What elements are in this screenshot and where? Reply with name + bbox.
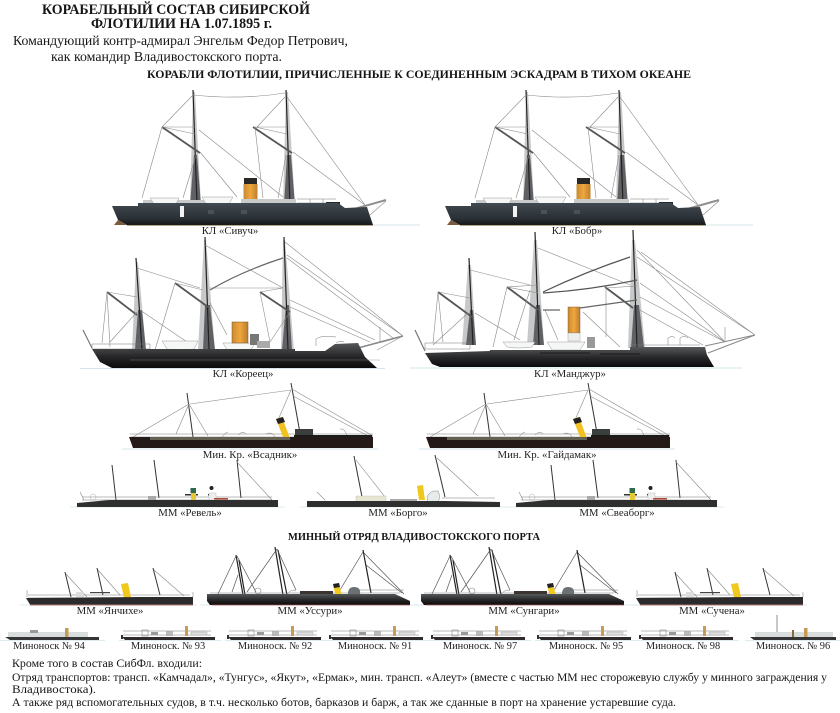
torpedo boat No 92: Миноноск. № 92 <box>238 641 312 652</box>
ship: gunboat Sivuch: КЛ «Сивуч» <box>202 225 258 237</box>
ship: Ussuri <box>200 547 425 617</box>
torpedo boat No 96 <box>745 615 840 652</box>
ship: torpedo vessel Revel <box>70 460 285 519</box>
heading: squadron ships: КОРАБЛИ ФЛОТИЛИИ, ПРИЧИСЛЕННЫЕ К СОЕДИНЕННЫМ ЭСКАДРАМ В ТИХОМ ОКЕАНЕ <box>147 69 691 81</box>
torpedo boat No 91: Миноноск. № 91 <box>338 641 412 652</box>
ship: Yanchihe: ММ «Янчихе» <box>77 605 143 617</box>
title <box>42 1 310 32</box>
ship: gunboat Koreets: КЛ «Кореец» <box>213 368 273 380</box>
heading: Vladivostok mine detachment: МИННЫЙ ОТРЯД ВЛАДИВОСТОКСКОГО ПОРТА <box>288 531 540 543</box>
ship: gunboat Bobr <box>445 90 753 237</box>
note: other fleet vessels: Кроме того в состав СибФл. входили: <box>12 658 202 670</box>
ship: torpedo vessel Sveaborg <box>509 460 724 519</box>
torpedo boat No 96: Миноноск. № 96 <box>756 641 830 652</box>
torpedo boat No 93: Миноноск. № 93 <box>131 641 205 652</box>
note: other fleet vessels: Отряд транспортов: трансп. «Камчадал», «Тунгус», «Якут», «Ермак», мин. трансп. «Алеут» (вместе с частью ММ нес сторожевую службу у минного заграждения у <box>12 672 827 684</box>
torpedo boat No 95: Миноноск. № 95 <box>549 641 623 652</box>
ship: Suchena: ММ «Сучена» <box>679 605 745 617</box>
ship: Yanchihe <box>20 568 197 617</box>
torpedo boat No 97: Миноноск. № 97 <box>443 641 517 652</box>
ship: mine cruiser Gaydamak <box>419 383 675 461</box>
ship: gunboat Sivuch <box>112 90 420 237</box>
commander note <box>13 34 348 65</box>
ship: Sungari: ММ «Сунгари» <box>488 605 560 617</box>
torpedo boat No 93 <box>119 626 221 652</box>
ship: Sungari <box>414 547 639 617</box>
ship: mine cruiser Vsadnik: Мин. Кр. «Всадник» <box>203 449 297 461</box>
ship: gunboat Manjur <box>410 230 755 380</box>
note: other fleet vessels: А также ряд вспомогательных судов, в т.ч. несколько ботов, барказов и барж, а так же сданные в порт на хранение устаревшие суда. <box>12 697 676 709</box>
ship: torpedo vessel Borgo <box>300 455 510 519</box>
note: other fleet vessels <box>12 658 827 709</box>
ship: torpedo vessel Revel: ММ «Ревель» <box>158 507 222 519</box>
ship: gunboat Bobr: КЛ «Бобр» <box>552 225 602 237</box>
commander note: как командир Владивостокского порта. <box>51 50 282 65</box>
torpedo boat No 91 <box>327 626 429 652</box>
torpedo boat No 97 <box>429 626 531 652</box>
ship: mine cruiser Gaydamak: Мин. Кр. «Гайдамак» <box>498 449 596 461</box>
torpedo boat No 94: Миноноск № 94 <box>13 641 86 652</box>
ship: Ussuri: ММ «Уссури» <box>277 605 343 617</box>
note: other fleet vessels: Владивостока). <box>12 684 96 696</box>
torpedo boat No 92 <box>225 626 327 652</box>
title: ФЛОТИЛИИ НА 1.07.1895 г. <box>91 16 272 32</box>
torpedo boat No 94 <box>0 628 105 652</box>
commander note: Командующий контр-адмирал Энгельм Федор Петрович, <box>13 34 348 49</box>
torpedo boat No 95 <box>535 626 637 652</box>
ship: gunboat Manjur: КЛ «Манджур» <box>534 368 606 380</box>
ship: mine cruiser Vsadnik <box>122 383 378 461</box>
torpedo boat No 98 <box>637 626 739 652</box>
torpedo boat No 98: Миноноск. № 98 <box>646 641 720 652</box>
ship: torpedo vessel Sveaborg: ММ «Свеаборг» <box>579 507 655 519</box>
title: КОРАБЕЛЬНЫЙ СОСТАВ СИБИРСКОЙ <box>42 1 310 18</box>
ship: gunboat Koreets <box>80 237 403 380</box>
ship: Suchena <box>630 568 807 617</box>
ship: torpedo vessel Borgo: ММ «Борго» <box>368 507 428 519</box>
